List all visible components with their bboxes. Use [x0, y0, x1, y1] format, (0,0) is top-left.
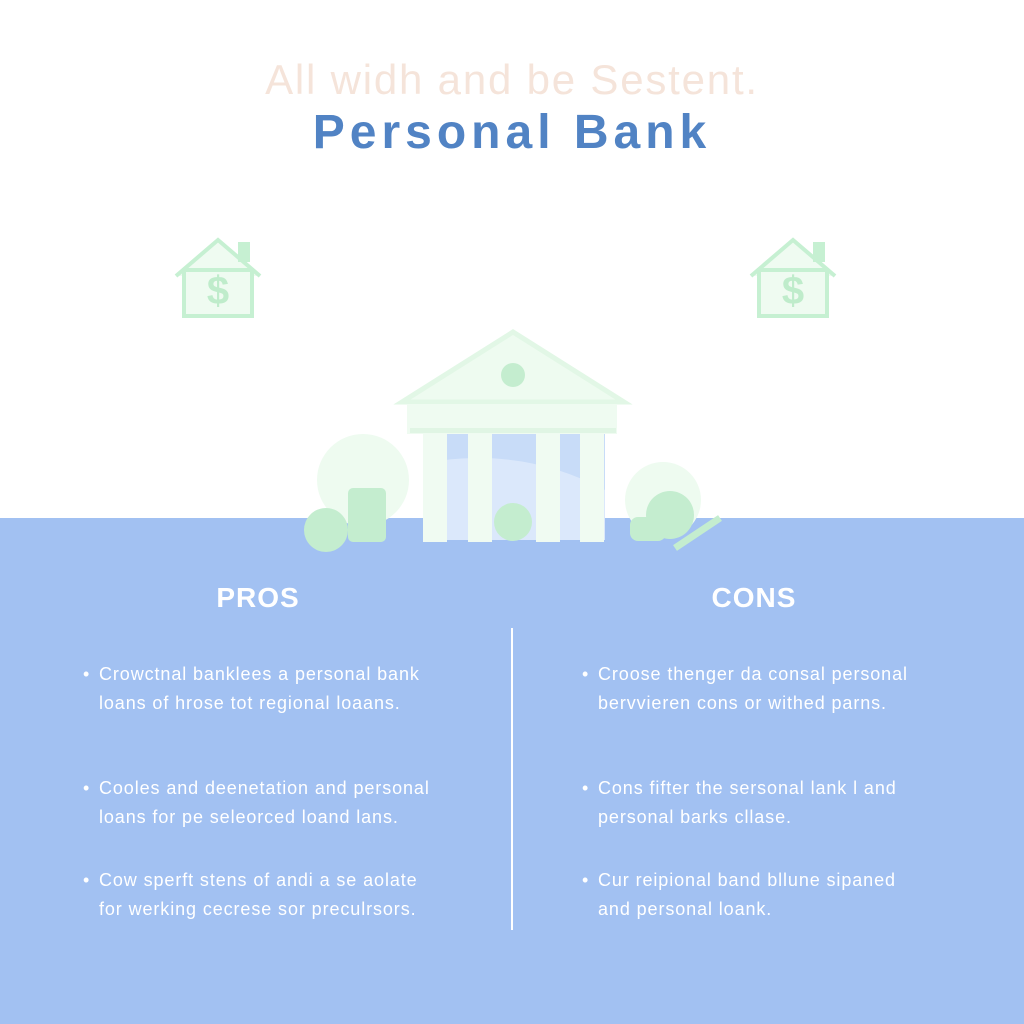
illustration: bank building [304, 329, 722, 552]
pro item 1: loans of hrose tot regional loaans. [99, 693, 401, 713]
con item 2: personal barks cllase. [598, 807, 792, 827]
text: • [582, 664, 589, 684]
pro item 1: Crowctnal banklees a personal bank [99, 664, 420, 684]
pro item 3 [83, 870, 418, 919]
icon: house left: $ [207, 269, 229, 313]
con item 3: Cur reipional band bllune sipaned [598, 870, 896, 890]
con item 3 [582, 870, 896, 919]
pro item 2: Cooles and deenetation and personal [99, 778, 430, 798]
con item 3: and personal loank. [598, 899, 772, 919]
title: Personal Bank [313, 106, 711, 159]
text: • [83, 664, 90, 684]
divider [511, 628, 513, 930]
text: • [582, 778, 589, 798]
con item 1: Croose thenger da consal personal [598, 664, 908, 684]
cons list [582, 664, 908, 919]
blue background panel [0, 518, 1024, 1024]
heading: cons: CONS [712, 582, 796, 613]
pro item 3: Cow sperft stens of andi a se aolate [99, 870, 418, 890]
icon: house right: $ [782, 269, 804, 313]
pro item 1 [83, 664, 420, 713]
pro item 2 [83, 778, 430, 827]
text: • [83, 778, 90, 798]
heading: pros: PROS [216, 582, 300, 613]
text: • [83, 870, 90, 890]
con item 2: Cons fifter the sersonal lank l and [598, 778, 897, 798]
con item 1 [582, 664, 908, 713]
con item 2 [582, 778, 897, 827]
subtitle: All widh and be Sestent. [265, 56, 759, 103]
icon: house right [750, 238, 836, 318]
icon: house left [174, 238, 262, 318]
pro item 2: loans for pe seleorced loand lans. [99, 807, 399, 827]
pros list [83, 664, 430, 919]
text: • [582, 870, 589, 890]
con item 1: bervvieren cons or withed parns. [598, 693, 887, 713]
pro item 3: for werking cecrese sor preculrsors. [99, 899, 416, 919]
